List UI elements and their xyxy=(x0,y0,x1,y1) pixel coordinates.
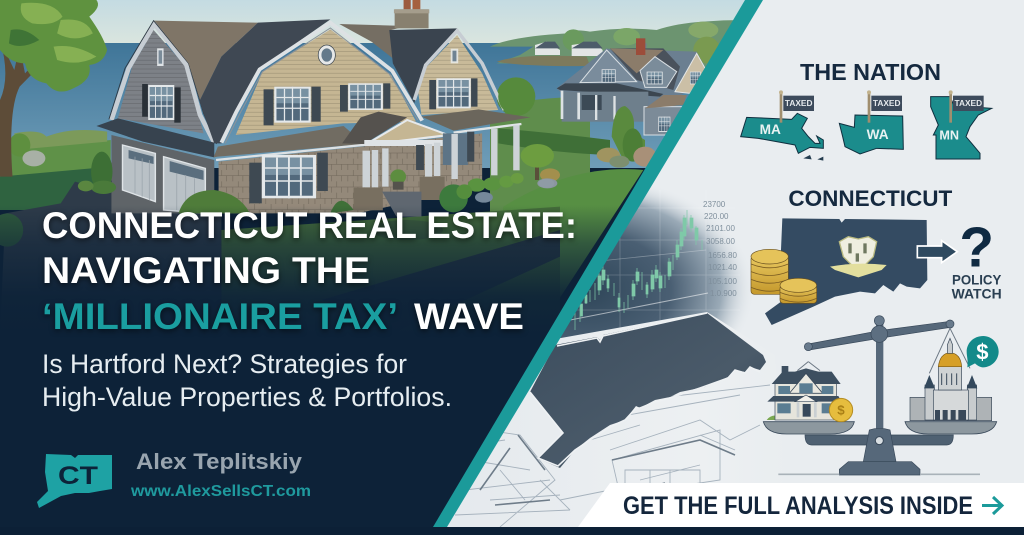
lower right lawn xyxy=(222,206,560,292)
banner: call to action xyxy=(578,483,1024,527)
right pan with capitol xyxy=(905,336,999,434)
sky xyxy=(89,0,745,43)
chart axis labels: 1656.80 xyxy=(708,251,737,260)
state: Massachusetts: MA xyxy=(760,122,781,137)
heading: The Nation: THE NATION xyxy=(800,59,941,85)
subtitle: Is Hartford Next? Strategies for xyxy=(42,349,407,379)
panel: house illustration xyxy=(0,0,745,297)
policy watch label: POLICY xyxy=(952,271,1002,287)
state: Minnesota: MN xyxy=(939,128,959,142)
subtitle xyxy=(42,349,452,412)
state: Massachusetts xyxy=(741,90,823,161)
pediment xyxy=(372,119,447,140)
lower roof xyxy=(214,126,364,157)
state: Washington xyxy=(839,90,903,154)
heading: the nation and state icons xyxy=(741,59,1002,325)
back roof xyxy=(340,24,398,58)
title xyxy=(42,205,577,337)
author name: Alex Teplitskiy xyxy=(136,449,303,474)
question mark: ? xyxy=(959,217,994,280)
subtitle: High-Value Properties & Portfolios. xyxy=(42,382,452,412)
title: NAVIGATING THE xyxy=(42,250,370,291)
roof dark xyxy=(189,19,330,143)
ground window xyxy=(249,153,328,203)
banner text: GET THE FULL ANALYSIS INSIDE xyxy=(623,492,973,520)
garage door right xyxy=(164,157,205,213)
chart axis labels: 220.00 xyxy=(704,212,729,221)
dark gradient overlay xyxy=(0,208,616,334)
candlesticks xyxy=(575,210,702,330)
title: WAVE xyxy=(414,296,524,337)
arrow xyxy=(917,241,957,263)
gable porch roof xyxy=(342,112,407,144)
driveway xyxy=(3,182,222,274)
left pan with house xyxy=(763,366,854,434)
watch label: WATCH xyxy=(952,285,1002,301)
right dark roof xyxy=(389,28,457,103)
chart axis labels xyxy=(703,200,737,298)
left lawn xyxy=(0,140,111,177)
distant shore and neighbouring house xyxy=(490,20,733,296)
stone wall xyxy=(219,133,482,213)
garage wall xyxy=(111,135,214,213)
state seal xyxy=(830,237,887,277)
chart axis labels: 1021.40 xyxy=(708,263,737,272)
garage door left xyxy=(122,145,155,202)
chart axis labels: 3058.00 xyxy=(706,237,735,246)
main gable siding xyxy=(236,29,416,135)
stone bases and steps xyxy=(354,177,445,217)
logo: CT map xyxy=(37,454,112,508)
title: ‘MILLIONAIRE TAX’ xyxy=(42,296,398,337)
porch roof xyxy=(421,109,530,131)
gable windows xyxy=(142,48,477,125)
heading: Connecticut: CONNECTICUT xyxy=(788,186,953,211)
chart axis labels: 1.0.900 xyxy=(710,289,737,298)
road xyxy=(373,230,560,286)
balance scale xyxy=(763,316,999,475)
shrubs xyxy=(0,94,548,246)
website: www.AlexSellsCT.com xyxy=(130,483,311,500)
chart panel xyxy=(560,191,744,338)
main house xyxy=(0,0,560,292)
title: CONNECTICUT REAL ESTATE: xyxy=(42,205,577,246)
state: Massachusetts: TAXED xyxy=(785,98,812,108)
left gable wall xyxy=(118,30,204,133)
banner arrow xyxy=(982,497,1002,514)
scale post and beam xyxy=(778,316,980,475)
state: Minnesota xyxy=(931,90,992,159)
bottom strip xyxy=(0,527,1024,535)
chart axis labels: 23700 xyxy=(703,200,726,209)
garage wing roof xyxy=(96,118,214,157)
roof brown xyxy=(154,21,258,100)
porch window xyxy=(416,132,474,170)
right pan with capitol: $ xyxy=(976,339,988,364)
teal diagonal band xyxy=(433,0,763,527)
state: Washington: TAXED xyxy=(873,98,900,108)
shore rocks and hedge xyxy=(14,130,107,150)
slate Connecticut map xyxy=(530,313,766,468)
Connecticut map with seal xyxy=(765,218,927,325)
sea xyxy=(0,43,690,168)
right gable siding xyxy=(418,35,498,115)
state: Washington: WA xyxy=(867,127,889,142)
logo: CT map: CT xyxy=(58,462,98,490)
panel: right analysis background xyxy=(420,0,1024,535)
tree xyxy=(0,0,107,177)
left pan with house: $ xyxy=(837,403,845,418)
blueprint sheets xyxy=(430,312,790,527)
chart axis labels: 2101.00 xyxy=(706,224,735,233)
columns xyxy=(362,125,520,187)
state: Minnesota: TAXED xyxy=(955,98,982,108)
chart axis labels: 105.100 xyxy=(708,277,737,286)
gold coin stacks xyxy=(751,249,817,303)
oval window xyxy=(318,45,335,65)
chimney xyxy=(394,0,429,28)
